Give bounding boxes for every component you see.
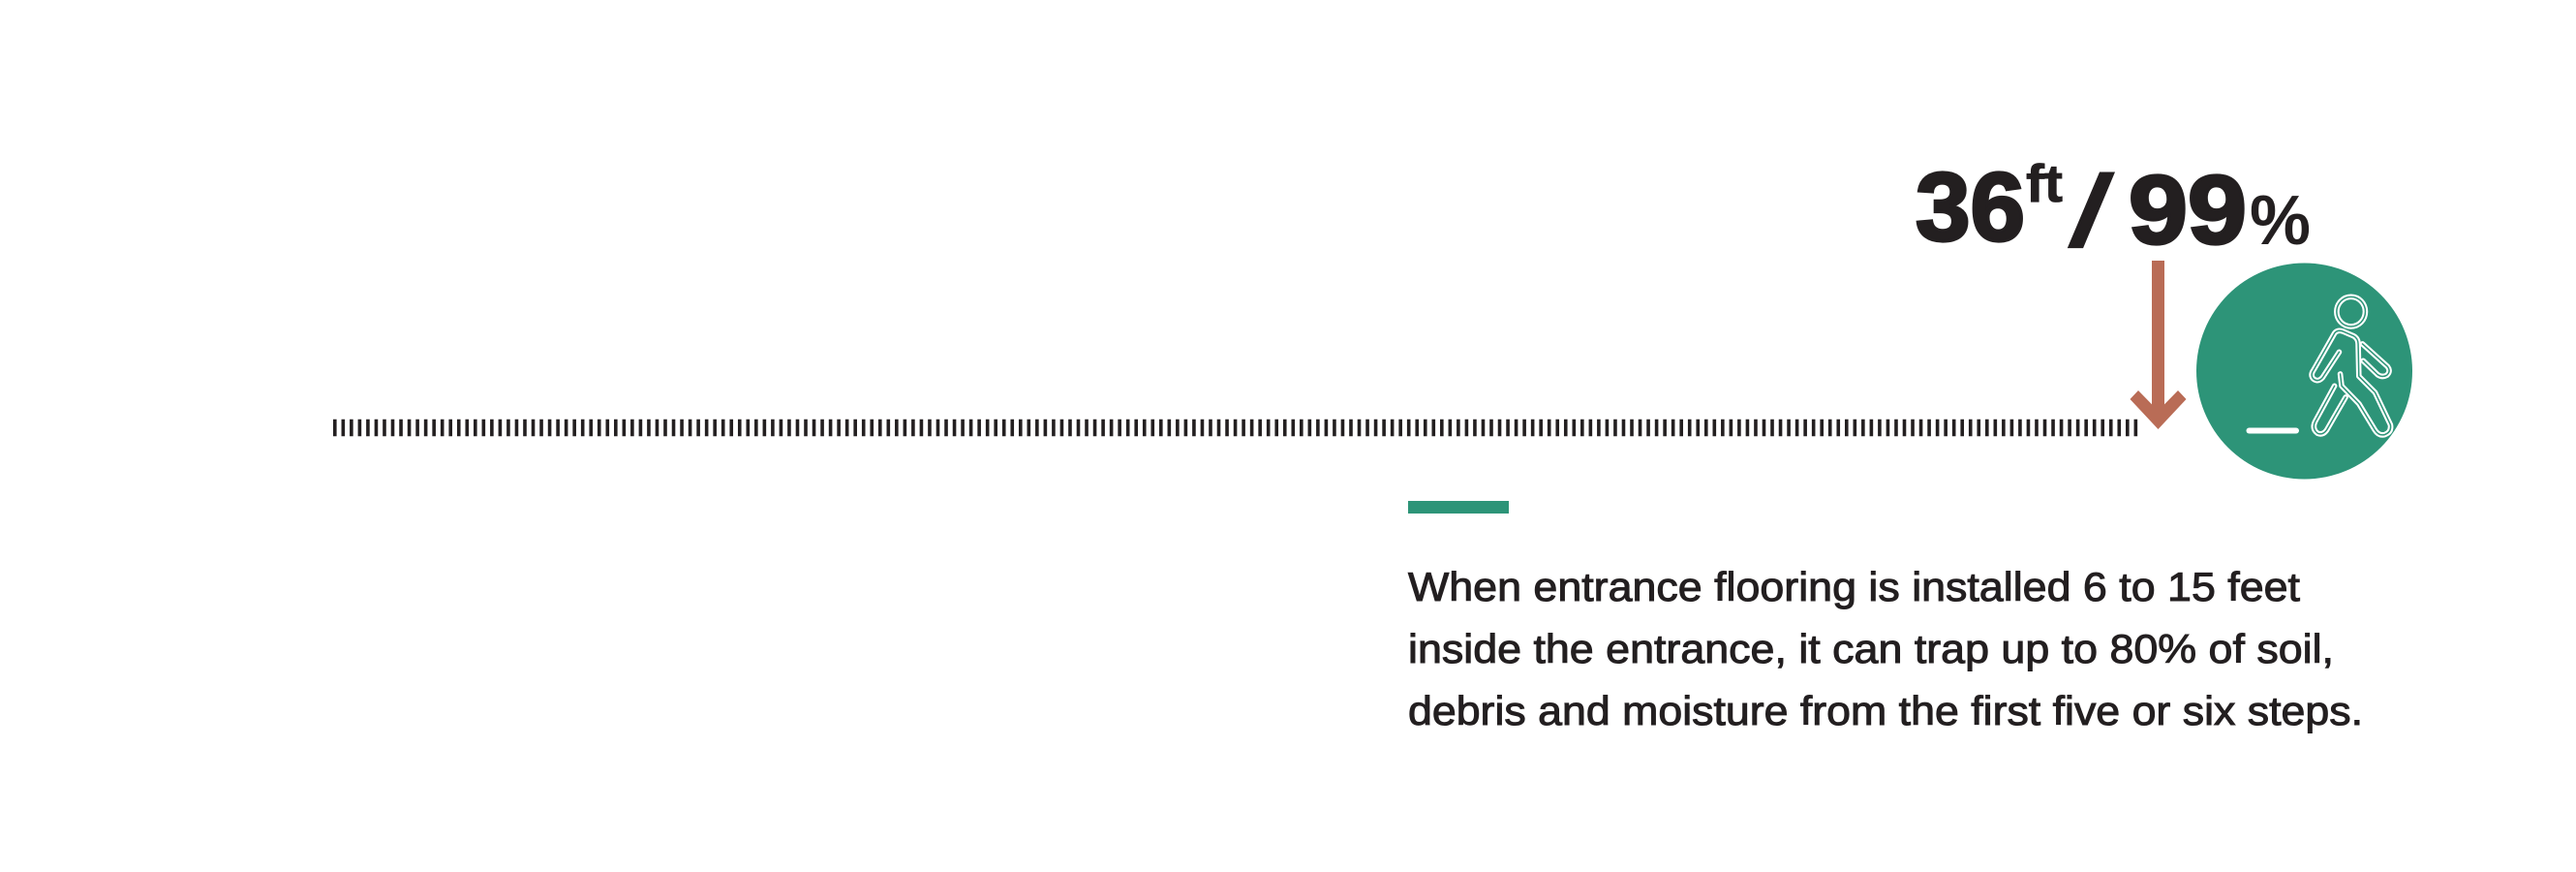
- headline: 36ft / 99%: [1916, 153, 2311, 267]
- body text block: [1408, 564, 2363, 733]
- body text block: debris and moisture from the first five or six steps.: [1408, 688, 2363, 733]
- headline: 36ft / 99%: /: [2070, 155, 2113, 267]
- body text block: When entrance flooring is installed 6 to 15 feet: [1408, 564, 2300, 609]
- green accent bar: [1408, 501, 1509, 514]
- headline: 36ft / 99%: ft: [2026, 153, 2063, 213]
- headline: 36ft / 99%: %: [2250, 182, 2311, 260]
- arrow pointing down to the line: [2131, 261, 2187, 429]
- body text block: inside the entrance, it can trap up to 80% of soil,: [1408, 626, 2334, 671]
- headline: 36ft / 99%: 99: [2129, 156, 2247, 265]
- tick-mark distance line: [333, 420, 2137, 436]
- icon: walking figure: [2312, 296, 2391, 435]
- icon: step dash: [2249, 428, 2296, 434]
- headline: 36ft / 99%: 36: [1916, 153, 2025, 262]
- icon: person walking in green circle: [2196, 264, 2412, 479]
